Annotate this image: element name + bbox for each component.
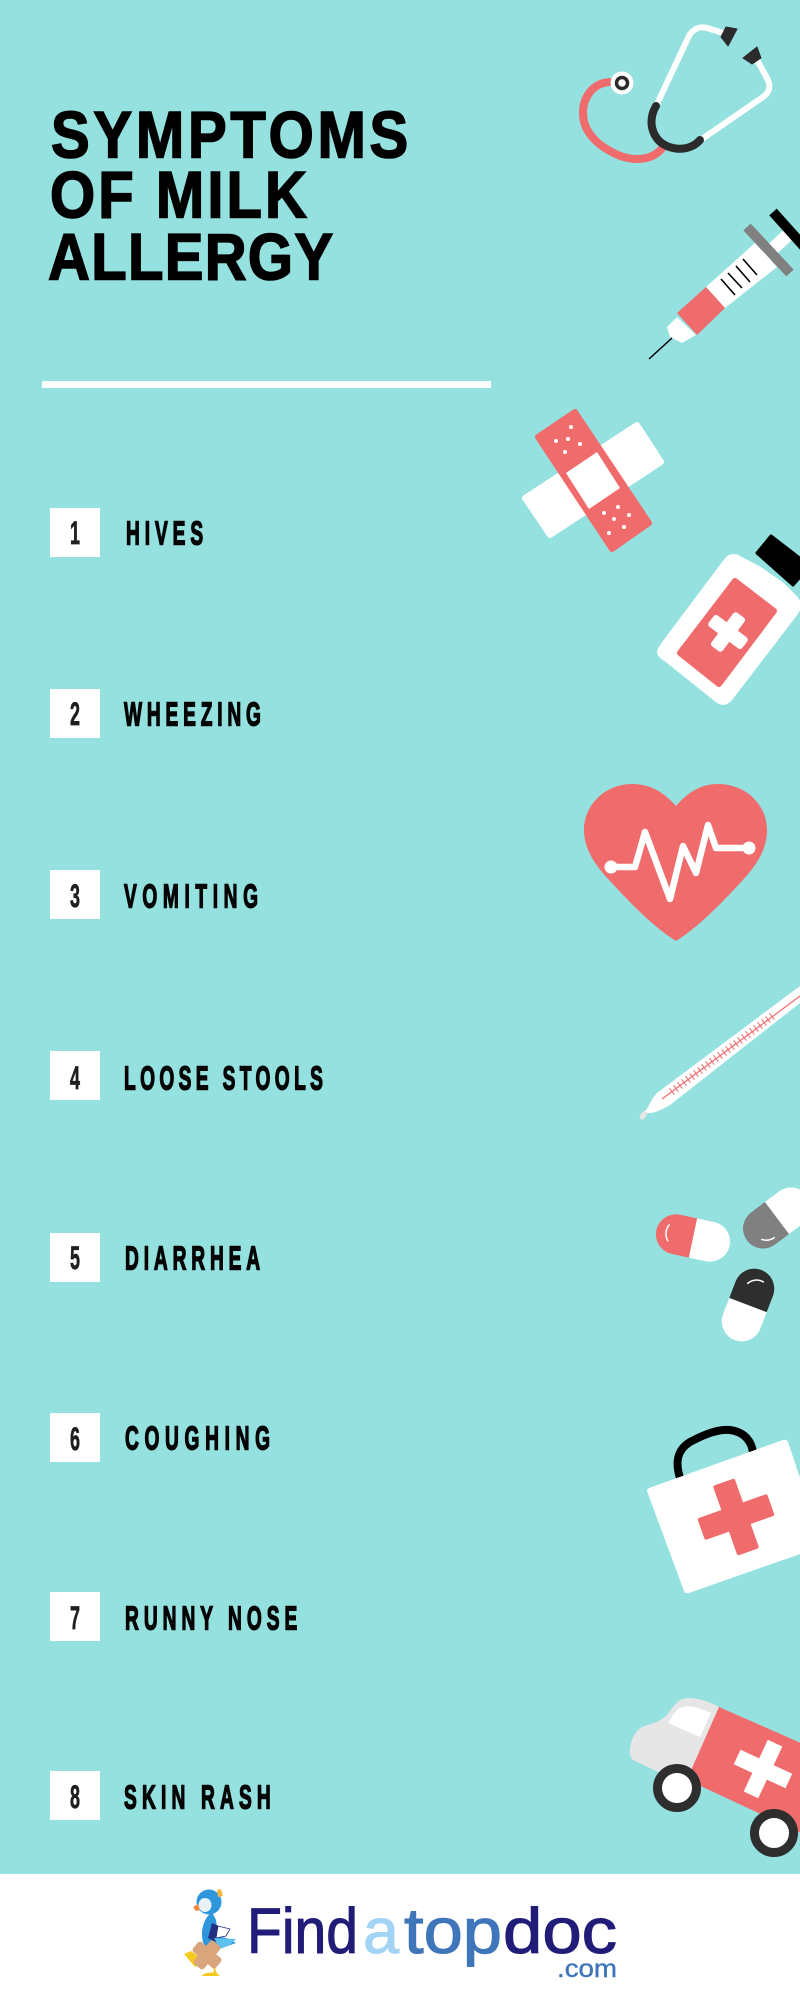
item 3: vomiting: VOMITING <box>124 878 258 915</box>
logo wordmark: a <box>363 1895 399 1967</box>
item 5: diarrhea: DIARRHEA <box>125 1240 260 1277</box>
item 1: hives <box>50 508 203 557</box>
title: SYMPTOMS <box>51 99 408 172</box>
icon: medicine bottle <box>658 536 800 704</box>
item 6: coughing: 6 <box>70 1423 80 1457</box>
icon: syringe <box>649 212 800 359</box>
item 7: runny nose <box>50 1592 297 1641</box>
item 8: skin rash <box>50 1771 271 1820</box>
item 3: vomiting: 3 <box>70 880 80 914</box>
title underline <box>42 381 491 388</box>
logo wordmark <box>247 1895 617 1983</box>
title: ALLERGY <box>48 221 333 294</box>
icon: bandage <box>525 412 661 549</box>
item 2: wheezing <box>50 689 261 738</box>
item 4: loose stools <box>50 1051 323 1100</box>
item 4: loose stools: LOOSE STOOLS <box>124 1060 323 1097</box>
logo mascot: duck <box>184 1889 236 1976</box>
logo wordmark: top <box>404 1895 502 1967</box>
item 8: skin rash: SKIN RASH <box>124 1779 271 1816</box>
icon: thermometer <box>642 986 800 1117</box>
logo wordmark: Find <box>247 1895 358 1967</box>
title: OF MILK <box>50 159 307 232</box>
item 4: loose stools: 4 <box>70 1062 80 1096</box>
item 6: coughing: COUGHING <box>125 1420 270 1457</box>
item 7: runny nose: RUNNY NOSE <box>125 1600 297 1637</box>
item 1: hives: HIVES <box>126 515 203 552</box>
item 5: diarrhea <box>50 1233 260 1282</box>
icon: heart with pulse <box>584 784 767 941</box>
item 6: coughing <box>50 1413 270 1462</box>
item 5: diarrhea: 5 <box>70 1242 80 1276</box>
symptom list <box>50 508 323 1820</box>
item 1: hives: 1 <box>70 517 80 551</box>
icon: pills <box>652 1179 800 1347</box>
footer band <box>0 1874 800 2000</box>
title <box>48 99 408 294</box>
item 2: wheezing: WHEEZING <box>124 696 261 733</box>
item 8: skin rash: 8 <box>70 1781 80 1815</box>
item 2: wheezing: 2 <box>70 698 80 732</box>
icon: first aid kit <box>647 1430 800 1593</box>
logo wordmark: .com <box>557 1955 617 1983</box>
icon: ambulance <box>630 1698 800 1852</box>
item 3: vomiting <box>50 870 258 919</box>
icon: stethoscope <box>583 27 769 159</box>
item 7: runny nose: 7 <box>70 1602 80 1636</box>
logo wordmark: doc <box>503 1895 617 1967</box>
